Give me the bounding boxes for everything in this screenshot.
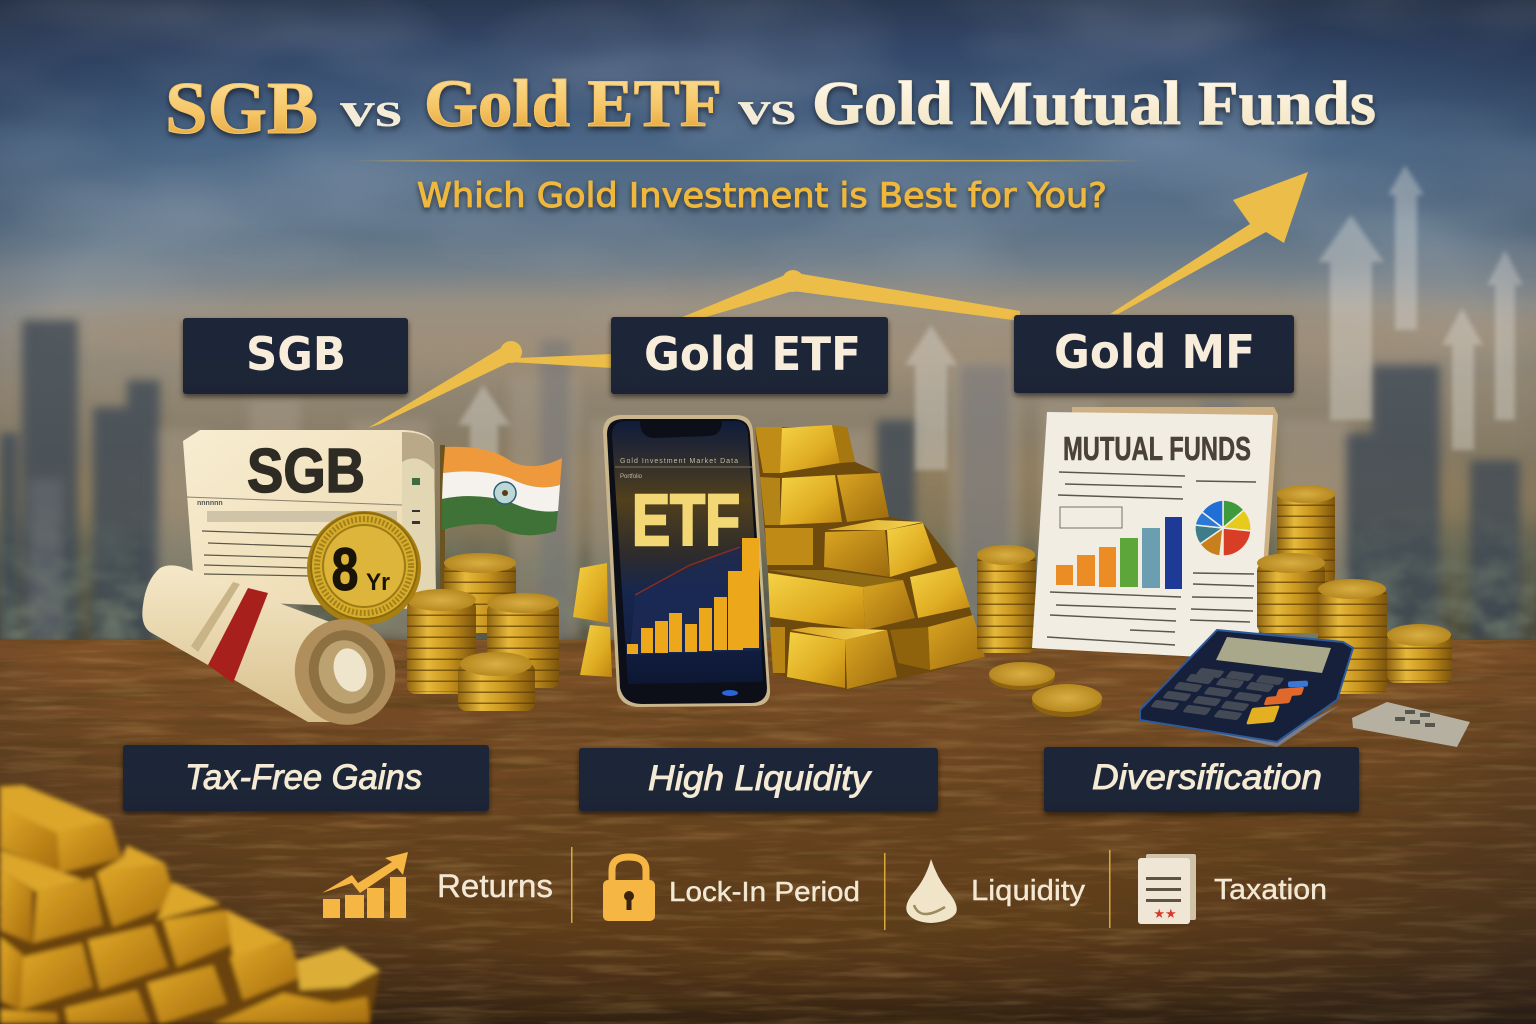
illustration: SGB bond, flag, coins	[142, 430, 562, 736]
benefit: High Liquidity	[579, 748, 938, 811]
background: pale rising arrows	[458, 165, 1523, 500]
illustration: ETF phone: Portfolio	[620, 474, 643, 480]
subtitle: Which Gold Investment is Best for You?	[417, 176, 1107, 216]
title	[165, 65, 1376, 150]
report bar chart	[1056, 517, 1182, 589]
legend: lock-in period	[603, 857, 860, 921]
label: SGB: SGB	[246, 327, 346, 381]
benefit: Tax-Free Gains	[123, 745, 489, 811]
benefit: High Liquidity: High Liquidity	[648, 759, 873, 798]
calculator	[1140, 630, 1353, 747]
bond certificate: nnnnnn	[197, 500, 223, 507]
background: city sky	[0, 0, 1536, 650]
label: SGB	[183, 318, 408, 394]
label: Gold MF: Gold MF	[1054, 325, 1255, 379]
rolled scroll	[142, 565, 407, 736]
illustration: ETF phone: ETF	[632, 481, 740, 561]
background: blurred skyline	[0, 320, 1520, 640]
coin stacks in front of report	[989, 553, 1452, 717]
legend: lock-in period: Lock-In Period	[669, 876, 860, 907]
report sheet	[1032, 407, 1278, 660]
icon: droplet	[906, 859, 957, 923]
legend: returns: Returns	[437, 868, 553, 904]
legend: taxation: Taxation	[1214, 874, 1327, 906]
bond certificate: SGB	[247, 437, 365, 506]
small keypad device	[1352, 702, 1470, 747]
legend: liquidity	[906, 859, 1086, 923]
title divider	[350, 160, 1145, 162]
legend: taxation	[1138, 854, 1327, 924]
title: vs	[738, 82, 796, 135]
illustration: ETF phone: Gold Investment Market Data	[620, 458, 738, 465]
coin stacks	[406, 553, 559, 711]
illustration: gold bar pile	[573, 425, 985, 690]
icon: tax document	[1138, 854, 1196, 924]
label: Gold ETF	[611, 317, 888, 394]
legend: returns	[322, 852, 553, 918]
legend: liquidity: Liquidity	[971, 875, 1086, 907]
foreground blurred gold bars	[0, 785, 380, 1024]
title: vs	[340, 81, 402, 137]
report pie chart	[1195, 500, 1251, 556]
benefit: Tax-Free Gains: Tax-Free Gains	[185, 758, 422, 797]
label: Gold MF	[1014, 315, 1294, 393]
8 Yr gold medal	[307, 511, 421, 625]
icon: tax document: ★★	[1153, 906, 1177, 921]
bond certificate	[183, 430, 436, 610]
8 Yr gold medal: Yr	[366, 569, 390, 596]
illustration: mutual funds report	[977, 407, 1470, 747]
coin stacks behind report	[977, 485, 1335, 653]
icon: rising bars	[322, 852, 408, 918]
8 Yr gold medal: 8	[332, 536, 358, 603]
benefit: Diversification	[1044, 747, 1359, 812]
rising gold trend arrow	[368, 172, 1308, 428]
title: SGB	[165, 68, 318, 150]
label: Gold ETF: Gold ETF	[644, 327, 861, 381]
benefit: Diversification: Diversification	[1092, 758, 1322, 797]
wooden table	[0, 640, 1536, 1024]
title: Gold Mutual Funds	[812, 70, 1376, 138]
india flag	[440, 445, 562, 590]
icon: padlock	[603, 857, 655, 921]
title: Gold ETF	[424, 65, 722, 141]
illustration: ETF phone	[603, 415, 770, 707]
report sheet: MUTUAL FUNDS	[1063, 430, 1251, 467]
